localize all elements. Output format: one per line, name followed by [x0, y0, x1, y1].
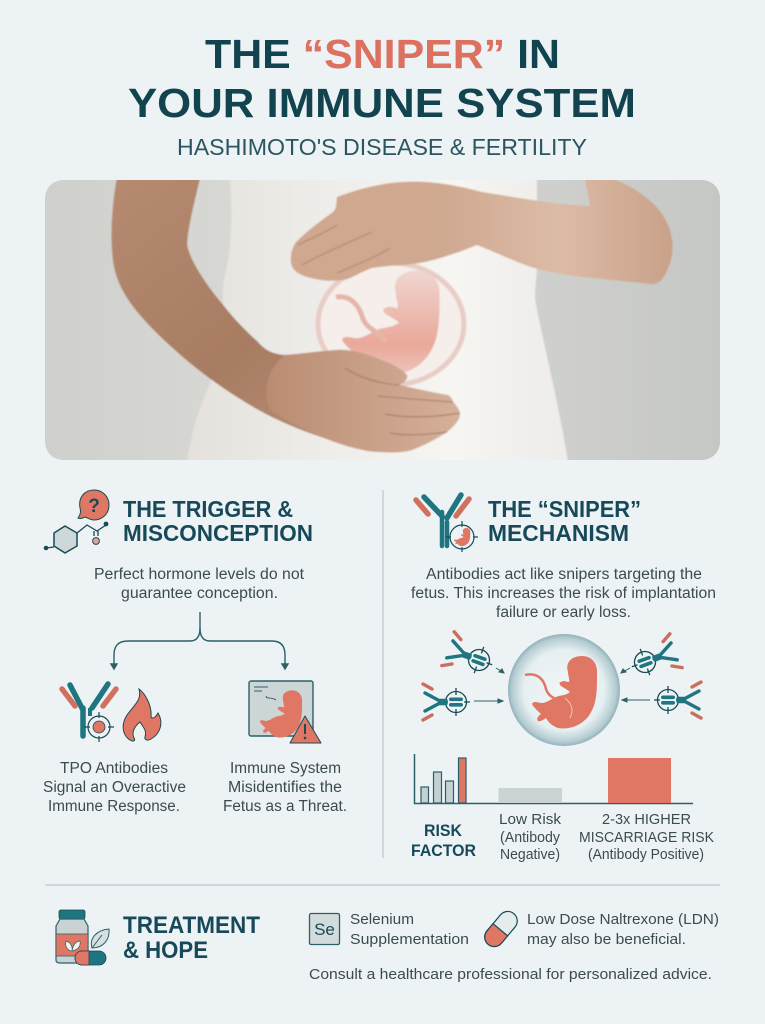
- antibody: middle right: [654, 682, 701, 718]
- arrows toward sphere: [474, 668, 650, 703]
- text: selenium: Selenium: [350, 911, 414, 928]
- heading: [123, 496, 313, 546]
- text: low dose naltrexone: may also be beneficial.: [527, 931, 686, 948]
- icon: medicine bottle, leaf and capsule: [56, 910, 109, 965]
- label: low risk: Low Risk: [499, 812, 562, 828]
- heading: MISCONCEPTION: [123, 520, 313, 546]
- text: TPO antibodies: [43, 760, 186, 815]
- heading: MECHANISM: [488, 520, 629, 546]
- label: risk factor: FACTOR: [411, 841, 476, 860]
- title: [128, 31, 636, 126]
- panel: the sniper mechanism: [411, 495, 716, 863]
- text: TPO antibodies: Immune Response.: [48, 798, 180, 815]
- label: low risk: [499, 812, 562, 863]
- upper hand finger lines: [298, 225, 390, 273]
- heading: TREATMENT: [123, 912, 260, 939]
- label: low risk: Negative): [500, 847, 560, 863]
- heading: [123, 912, 260, 964]
- antibody: top right: [626, 634, 682, 684]
- heading: & HOPE: [123, 937, 208, 964]
- label: higher miscarriage risk: MISCARRIAGE RISK: [579, 830, 714, 846]
- intro text: [94, 566, 305, 602]
- icon: antibody targeting fetus: [416, 495, 478, 552]
- fetus ring overlay: [318, 263, 464, 385]
- lower hand finger lines: [345, 368, 460, 435]
- text: selenium: [350, 911, 469, 948]
- text: TPO antibodies: TPO Antibodies: [60, 760, 168, 777]
- heading: THE TRIGGER &: [123, 496, 293, 522]
- label: low risk: (Antibody: [500, 830, 561, 846]
- intro text: guarantee conception.: [121, 585, 278, 602]
- text: immune system: Misidentifies the: [228, 779, 342, 796]
- icon: question bubble and molecule: ?: [88, 496, 100, 517]
- sphere with fetus: [508, 634, 620, 746]
- subtitle: HASHIMOTO'S DISEASE & FERTILITY: [177, 134, 587, 160]
- left arm and lower hand: [110, 180, 323, 438]
- label: higher miscarriage risk: [579, 812, 714, 863]
- label: risk factor: RISK: [424, 821, 463, 840]
- upper hand and right arm: [291, 178, 672, 284]
- text: immune system: Fetus as a Threat.: [223, 798, 347, 815]
- icon: antibody with flame: [62, 684, 161, 742]
- icon: selenium box: [310, 914, 340, 944]
- title: YOUR IMMUNE SYSTEM: [128, 80, 636, 126]
- divider: horizontal: [45, 884, 720, 886]
- icon: capsule: [481, 908, 521, 950]
- text: TPO antibodies: Signal an Overactive: [43, 779, 186, 796]
- text: selenium: Supplementation: [350, 931, 469, 948]
- intro text: [411, 566, 716, 621]
- label: higher miscarriage risk: 2-3x HIGHER: [602, 812, 691, 828]
- divider: vertical: [382, 490, 384, 858]
- text: immune system: Immune System: [230, 760, 341, 777]
- lower hand: [266, 350, 460, 452]
- text: consult note: Consult a healthcare professional for personalized advice.: [309, 966, 712, 983]
- intro text: Perfect hormone levels do not: [94, 566, 305, 583]
- icon: selenium box: Se: [314, 920, 335, 939]
- antibody: middle left: [423, 684, 470, 720]
- heading: THE “SNIPER”: [488, 496, 641, 522]
- text: low dose naltrexone: Low Dose Naltrexone (LDN): [527, 911, 719, 928]
- heading: [488, 496, 641, 546]
- hero photo: hands on pregnant belly with fetus overlay: [45, 178, 720, 462]
- arrow: branching bracket: [111, 612, 288, 669]
- shirt: [187, 178, 568, 462]
- intro text: fetus. This increases the risk of implantation: [411, 585, 716, 602]
- text: low dose naltrexone: [527, 911, 719, 948]
- intro text: failure or early loss.: [496, 604, 631, 621]
- panel: the trigger and misconception: [43, 490, 347, 815]
- icon: ultrasound fetus with warning: [249, 681, 321, 743]
- bar chart: risk factor: [414, 754, 693, 804]
- antibody: top left: [442, 632, 498, 682]
- text: immune system: [223, 760, 347, 815]
- icon: question bubble and molecule: [44, 490, 109, 553]
- illustration: antibodies targeting fetus in sphere: [423, 632, 701, 746]
- label: risk factor: [411, 821, 476, 860]
- panel: treatment and hope: [56, 908, 719, 983]
- intro text: Antibodies act like snipers targeting the: [426, 566, 702, 583]
- label: higher miscarriage risk: (Antibody Positive): [588, 847, 704, 863]
- title: THE “SNIPER” IN: [205, 31, 560, 77]
